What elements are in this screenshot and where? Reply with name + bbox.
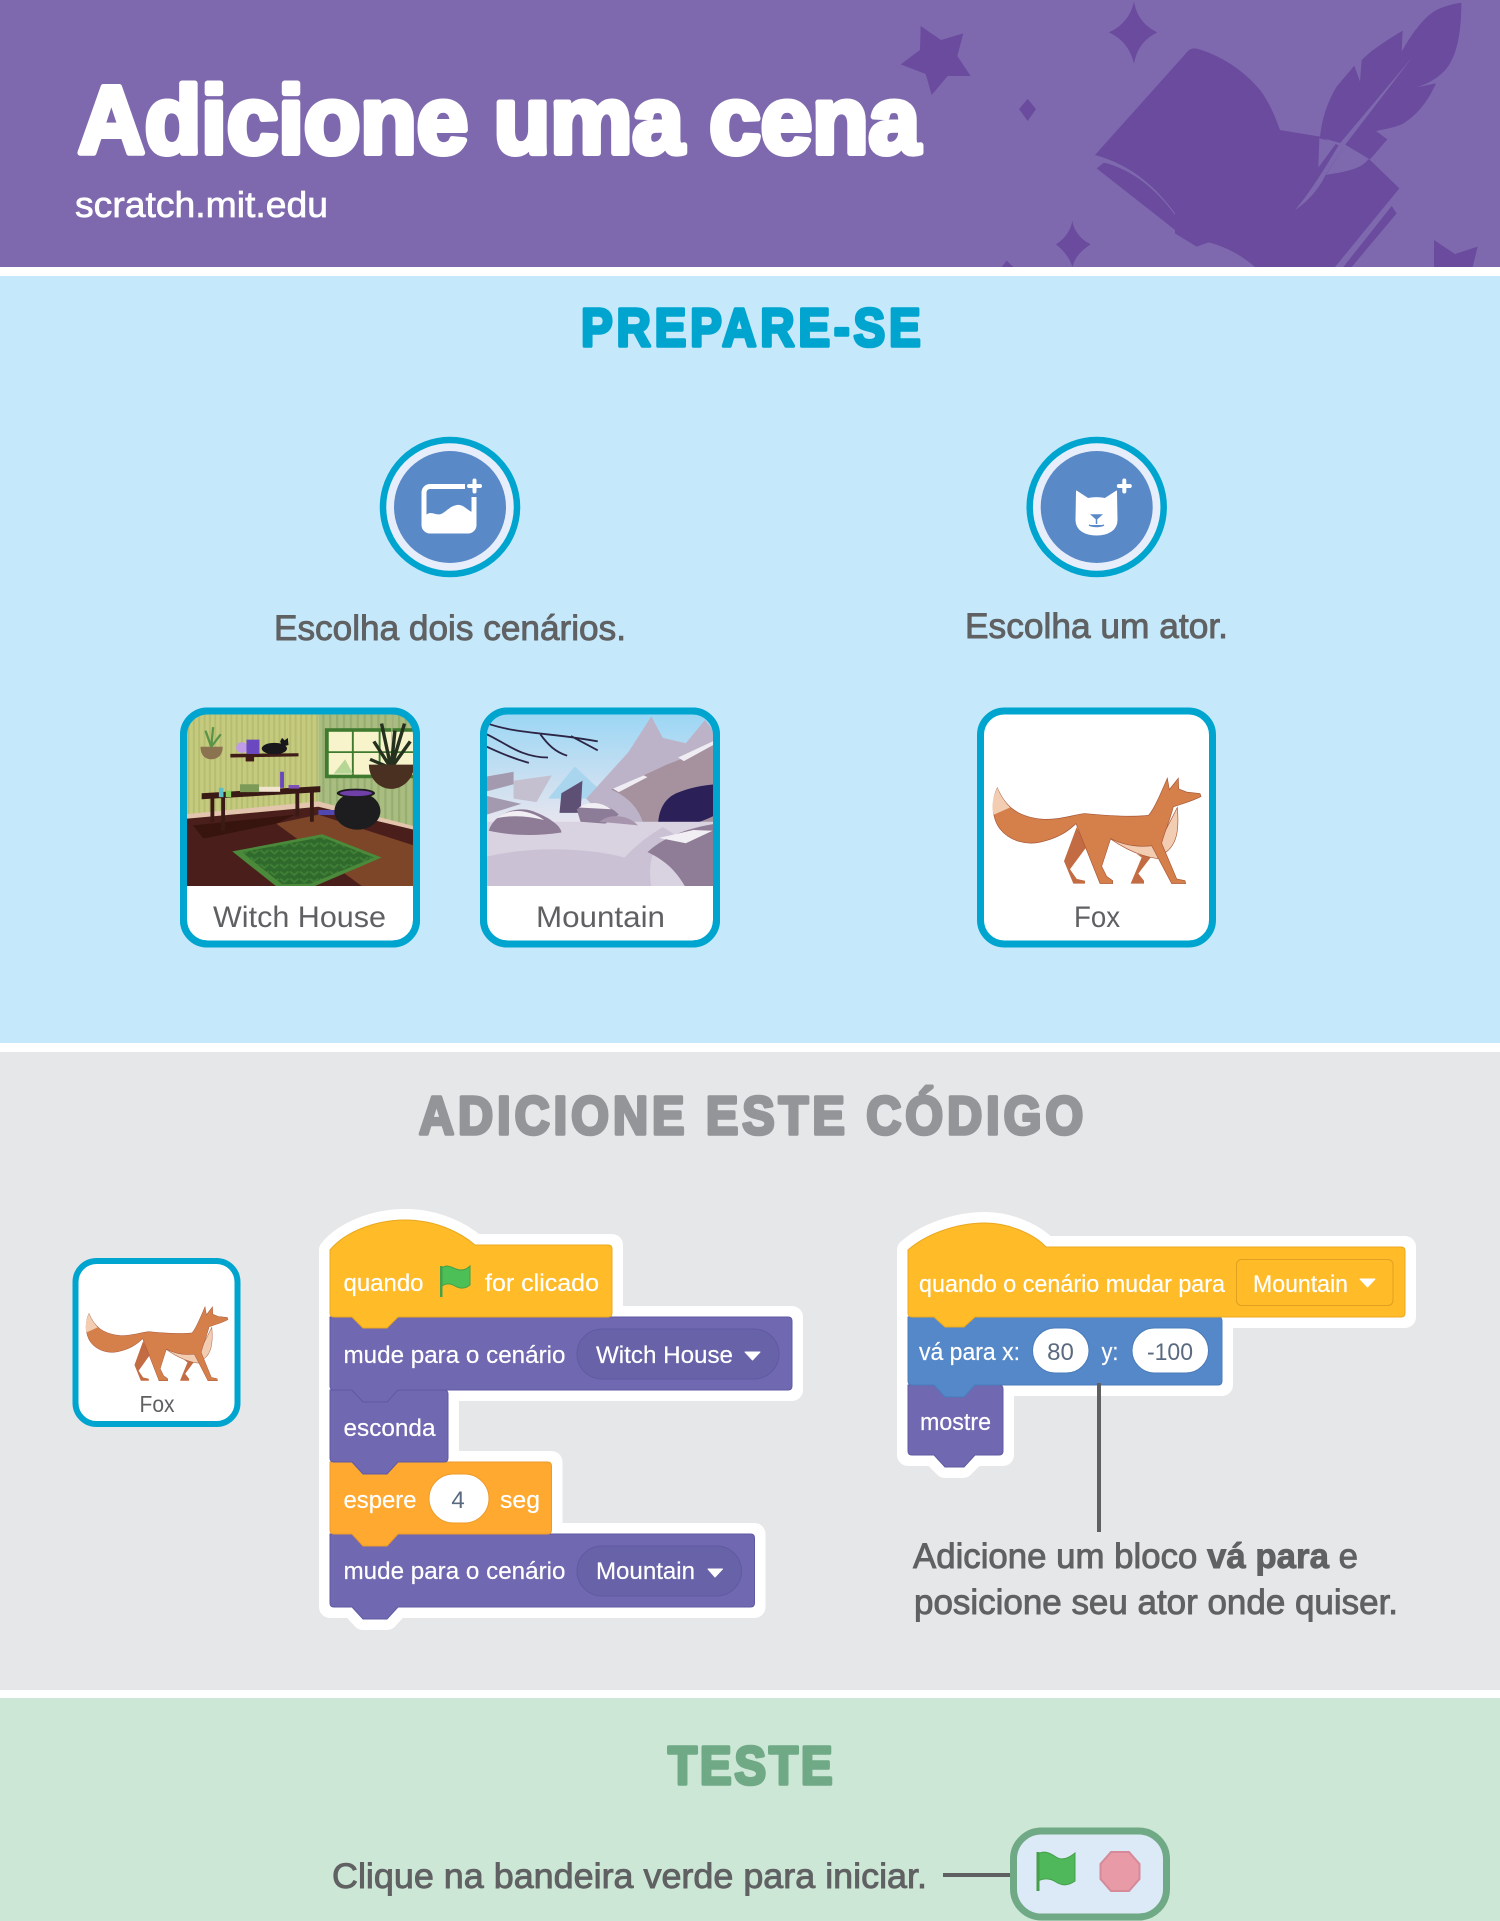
caption: witch house: Witch House bbox=[213, 901, 386, 934]
header illustration: book, quill and stars bbox=[901, 2, 1478, 267]
icon: choose sprite bbox=[1030, 440, 1164, 574]
heading: prepare-se: PREPARE-SE bbox=[581, 297, 921, 358]
code stack: green flag script bbox=[330, 1220, 792, 1619]
caption: fox small: Fox bbox=[140, 1391, 175, 1417]
callout text: posicione seu ator onde quiser. bbox=[914, 1583, 1398, 1622]
card: witch house bbox=[181, 709, 419, 944]
card: fox bbox=[980, 711, 1212, 944]
panel: teste bbox=[0, 1698, 1500, 1921]
url subtitle: scratch.mit.edu bbox=[75, 184, 328, 225]
icon: choose backdrop bbox=[383, 440, 517, 574]
block: mude para o cenario mountain: Mountain bbox=[596, 1558, 695, 1585]
title: Adicione uma cena bbox=[78, 67, 921, 174]
block: espere 4 seg: 4 bbox=[451, 1487, 465, 1514]
heading: teste: TESTE bbox=[668, 1735, 833, 1796]
icon: stop sign bbox=[1100, 1852, 1140, 1891]
callout text: Adicione um bloco vá para e bbox=[913, 1537, 1358, 1576]
block: esconda: esconda bbox=[344, 1415, 436, 1442]
icon: green flag bbox=[1036, 1852, 1075, 1891]
text: click green flag: Clique na bandeira verde para iniciar. bbox=[332, 1857, 927, 1896]
block: va para x y: 80 bbox=[1047, 1339, 1074, 1366]
caption: mountain: Mountain bbox=[536, 901, 665, 934]
caption: fox: Fox bbox=[1074, 901, 1120, 934]
block: mostre: mostre bbox=[920, 1409, 991, 1436]
sprite: fox small bbox=[86, 1307, 228, 1381]
connector line bbox=[943, 1873, 1029, 1877]
block: va para x y: y: bbox=[1102, 1339, 1118, 1366]
block: quando for clicado: quando bbox=[344, 1270, 424, 1297]
text: choose sprite: Escolha um ator. bbox=[965, 607, 1228, 646]
block: va para x y: vá para x: bbox=[919, 1339, 1020, 1366]
panel: header bbox=[0, 0, 1500, 267]
block: quando for clicado: for clicado bbox=[485, 1270, 599, 1297]
backdrop image: witch house bbox=[181, 709, 419, 888]
backdrop image: mountain bbox=[479, 709, 720, 888]
code stack: backdrop switch script bbox=[908, 1223, 1405, 1467]
block: quando o cenario mudar para: quando o cenário mudar para bbox=[919, 1271, 1226, 1298]
heading: adicione este codigo: ADICIONE ESTE CÓDIGO bbox=[419, 1085, 1083, 1146]
callout line bbox=[1097, 1383, 1101, 1532]
sprite: fox bbox=[992, 778, 1201, 884]
block: mude para o cenario witch house: mude para o cenário bbox=[344, 1342, 566, 1369]
block: mude para o cenario witch house bbox=[344, 1329, 779, 1379]
callout text bbox=[913, 1537, 1398, 1622]
block: espere 4 seg: seg bbox=[500, 1487, 540, 1514]
card: fox sprite bbox=[76, 1261, 238, 1424]
panel: prepare-se bbox=[0, 276, 1500, 1043]
panel: adicione este codigo bbox=[0, 1052, 1500, 1690]
block: quando o cenario mudar para bbox=[919, 1260, 1393, 1306]
text: choose backdrops: Escolha dois cenários. bbox=[274, 609, 626, 648]
block: va para x y bbox=[919, 1328, 1208, 1373]
block: mude para o cenario mountain: mude para o cenário bbox=[344, 1558, 566, 1585]
block: espere 4 seg: espere bbox=[344, 1487, 416, 1514]
control box: flag and stop bbox=[1014, 1831, 1166, 1917]
card: mountain bbox=[479, 709, 720, 944]
block: quando o cenario mudar para: Mountain bbox=[1253, 1271, 1348, 1298]
block: quando for clicado bbox=[344, 1266, 599, 1297]
block: espere 4 seg bbox=[344, 1474, 540, 1523]
block: mude para o cenario mountain bbox=[344, 1546, 742, 1596]
block: mude para o cenario witch house: Witch House bbox=[596, 1342, 733, 1369]
block: va para x y: -100 bbox=[1147, 1339, 1193, 1366]
